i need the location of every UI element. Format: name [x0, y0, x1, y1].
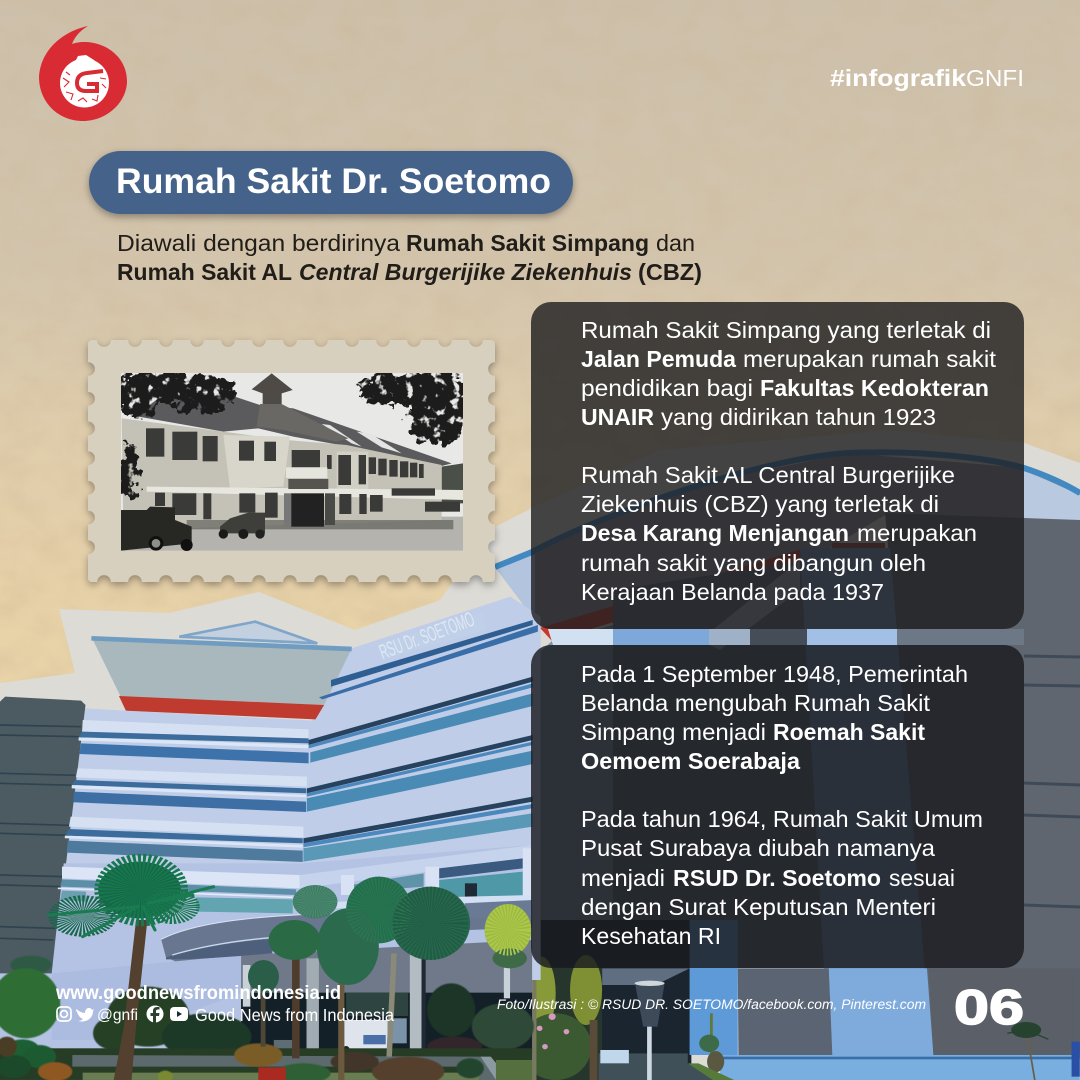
icon: facebook [146, 1006, 164, 1023]
paragraph: CBZ: Ziekenhuis (CBZ) yang terletak di [581, 491, 939, 517]
paragraph: Rumah Sakit Simpang: Jalan Pemuda [581, 346, 736, 372]
trees [113, 370, 470, 497]
paragraph: CBZ [581, 462, 977, 605]
hashtag: GNFI [966, 65, 1024, 91]
paragraph: CBZ: rumah sakit yang dibangun oleh [581, 550, 926, 576]
footer website and social: Good News from Indonesia [195, 1005, 394, 1025]
paragraph: 1964 [581, 806, 983, 949]
paragraph: 1964: sesuai [889, 865, 955, 891]
hashtag [830, 65, 1024, 91]
intro text: dan [656, 230, 695, 256]
walls [122, 418, 442, 530]
entrance, gardens and palms [0, 845, 534, 1080]
intro text: (CBZ) [638, 259, 702, 285]
paragraph: 1964: RSUD Dr. Soetomo [673, 865, 881, 891]
vehicles [121, 507, 265, 551]
paragraph: Rumah Sakit Simpang: UNAIR [581, 404, 654, 430]
title pill: Rumah Sakit Dr. Soetomo [116, 162, 551, 201]
stamp frame [88, 340, 495, 582]
paragraph: 1948: Belanda mengubah Rumah Sakit [581, 690, 931, 716]
panel: top history [531, 302, 1024, 629]
main wing [0, 597, 541, 980]
paragraph: CBZ: Rumah Sakit AL Central Burgerijike [581, 462, 955, 488]
small planting [699, 1013, 724, 1072]
icon: twitter [76, 1008, 94, 1021]
fan palm crown [48, 862, 214, 937]
blue sign [1072, 1042, 1080, 1077]
light strip between panels [548, 629, 1024, 645]
logo: red swirl [39, 26, 127, 121]
paragraph: Rumah Sakit Simpang: pendidikan bagi [581, 375, 753, 401]
paragraph: CBZ: merupakan [857, 520, 977, 546]
paragraph: 1948: Roemah Sakit [773, 719, 925, 745]
ambulance [344, 1018, 407, 1048]
logo: white eagle emblem [60, 55, 109, 108]
garden foliage [0, 955, 534, 1048]
paragraph: 1964: Pada tahun 1964, Rumah Sakit Umum [581, 806, 983, 832]
paragraph: 1964: Kesehatan RI [581, 923, 721, 949]
paragraph: Rumah Sakit Simpang: merupakan rumah sakit [743, 346, 997, 372]
paragraph: CBZ: Kerajaan Belanda pada 1937 [581, 579, 884, 605]
stamp with archival photo [88, 340, 495, 582]
roof [135, 395, 452, 466]
window bands, right [303, 620, 538, 862]
cluster palms [248, 877, 531, 993]
ground level [0, 1048, 532, 1080]
paragraph: CBZ: Desa Karang Menjangan [581, 520, 849, 546]
hashtag: #infografik [830, 65, 966, 91]
title pill [89, 151, 573, 214]
paragraph: 1964: Pusat Surabaya diubah namanya [581, 835, 935, 861]
lower facade [0, 845, 532, 1080]
paragraph: 1948: Simpang menjadi [581, 719, 766, 745]
dark glass base [241, 993, 532, 1053]
right wing roof and facade [495, 452, 1080, 1058]
footer website and social: www.goodnewsfromindonesia.id [55, 983, 341, 1004]
icon: instagram [57, 1007, 71, 1021]
small palm [1007, 1022, 1048, 1080]
left dark tower [0, 697, 86, 980]
paragraph: 1948: Pada 1 September 1948, Pemerintah [581, 661, 968, 687]
entrance canopy [161, 914, 532, 957]
under canopy wall [165, 940, 532, 993]
torn white paper edge [0, 430, 1080, 1080]
entrance and lower right [520, 920, 1080, 1080]
footer website and social [55, 983, 394, 1025]
red upper canopy [91, 622, 352, 719]
windows [146, 428, 460, 519]
lamp post [635, 981, 665, 1080]
paragraph: 1948 [581, 661, 968, 774]
icon: youtube [170, 1007, 188, 1021]
intro text: Rumah Sakit Simpang [406, 230, 649, 256]
panel: later history [531, 645, 1024, 968]
paragraph: 1964: dengan Surat Keputusan Menteri [581, 894, 936, 920]
intro text: Rumah Sakit AL [117, 259, 292, 285]
intro text [117, 230, 702, 285]
logo [39, 26, 127, 121]
paragraph: Rumah Sakit Simpang: yang didirikan tahun 1923 [661, 404, 936, 430]
sign lettering on roof: RSU Dr. SOETOMO [376, 608, 478, 664]
window bands, left [65, 732, 309, 862]
archival photo of hospital [113, 370, 470, 551]
paragraph: Rumah Sakit Simpang: Fakultas Kedokteran [760, 375, 989, 401]
paragraph: Rumah Sakit Simpang: Rumah Sakit Simpang yang terletak di [581, 317, 991, 343]
trunks [114, 920, 397, 1080]
paragraph: 1964: menjadi [581, 865, 665, 891]
columns [307, 958, 319, 1051]
paragraph: 1948: Oemoem Soerabaja [581, 748, 800, 774]
paragraph: Rumah Sakit Simpang [581, 317, 997, 430]
footer website and social: @gnfi [97, 1007, 138, 1024]
intro text: Diawali dengan berdirinya [117, 230, 400, 256]
hospital building photograph [0, 430, 1080, 1080]
intro text: Central Burgerijike Ziekenhuis [299, 259, 632, 285]
photo credit: Foto/Ilustrasi : © RSUD DR. SOETOMO/facebook.com, Pinterest.com [497, 997, 926, 1012]
page number: 06 [954, 981, 1024, 1035]
